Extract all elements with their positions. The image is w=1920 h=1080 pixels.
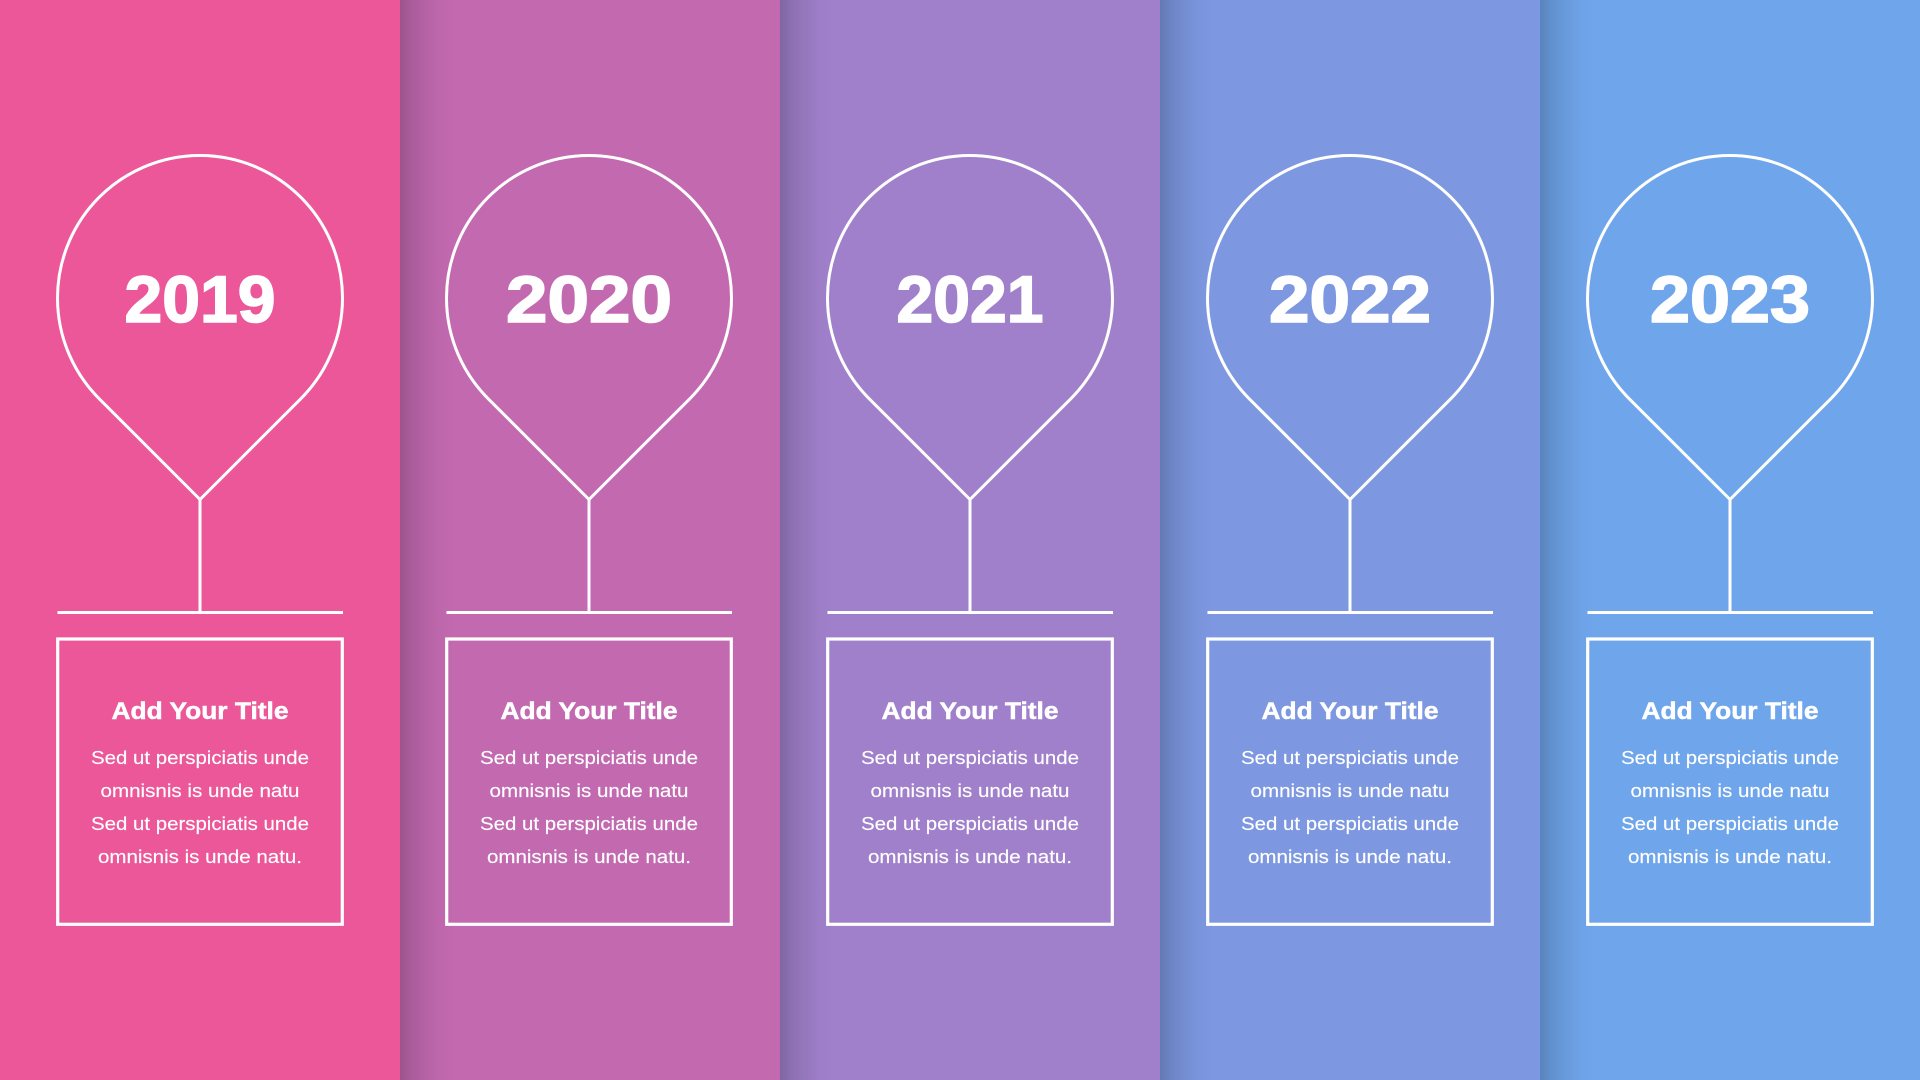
icon: location pin with stem and baseline [828, 155, 1113, 612]
box body text: Sed ut perspiciatis unde [1241, 747, 1459, 768]
box outline [58, 639, 342, 924]
box body text [1621, 747, 1839, 867]
year: 2023: 2023 [1650, 262, 1810, 336]
box title: Add Your Title [1642, 698, 1818, 725]
box title: Add Your Title [500, 698, 678, 725]
year: 2022: 2022 [1269, 262, 1431, 336]
box outline [1588, 639, 1872, 924]
box body text [91, 747, 309, 867]
box body text: omnisnis is unde natu. [1248, 846, 1452, 867]
box title: Add Your Title [882, 698, 1058, 725]
box title: Add Your Title [1262, 698, 1438, 725]
box body text: Sed ut perspiciatis unde [480, 747, 698, 768]
box body text [1241, 747, 1459, 867]
box body text: omnisnis is unde natu. [98, 846, 302, 867]
box body text: Sed ut perspiciatis unde [91, 747, 309, 768]
box body text: omnisnis is unde natu. [487, 846, 691, 867]
icon: location pin with stem and baseline [1208, 155, 1493, 612]
box body text: Sed ut perspiciatis unde [91, 813, 309, 834]
panel: 2022 [1160, 0, 1540, 1080]
year: 2021: 2021 [896, 262, 1044, 336]
box outline [828, 639, 1112, 924]
box body text: omnisnis is unde natu [490, 780, 688, 801]
box body text: Sed ut perspiciatis unde [1241, 813, 1459, 834]
icon: location pin with stem and baseline [446, 155, 732, 612]
box body text: omnisnis is unde natu. [868, 846, 1072, 867]
icon: location pin with stem and baseline [58, 155, 343, 612]
box body text: omnisnis is unde natu [1630, 780, 1830, 801]
panel: 2020 [400, 0, 780, 1080]
box outline [1208, 639, 1492, 924]
icon: location pin with stem and baseline [1588, 155, 1873, 612]
box outline [447, 639, 731, 924]
text box [447, 639, 731, 924]
box body text: omnisnis is unde natu. [1628, 846, 1832, 867]
year: 2019: 2019 [124, 262, 276, 336]
box body text: omnisnis is unde natu [1250, 780, 1450, 801]
text box [58, 639, 342, 924]
box body text: Sed ut perspiciatis unde [480, 813, 698, 834]
box body text: Sed ut perspiciatis unde [861, 747, 1079, 768]
text box [1588, 639, 1872, 924]
panel: 2019 [0, 0, 400, 1080]
box body text: omnisnis is unde natu [870, 780, 1070, 801]
year: 2020: 2020 [506, 262, 672, 336]
box body text [861, 747, 1079, 867]
box body text: Sed ut perspiciatis unde [1621, 813, 1839, 834]
box body text: omnisnis is unde natu [100, 780, 300, 801]
box title: Add Your Title [112, 698, 288, 725]
box body text [480, 747, 698, 867]
text box [828, 639, 1112, 924]
box body text: Sed ut perspiciatis unde [1621, 747, 1839, 768]
box body text: Sed ut perspiciatis unde [861, 813, 1079, 834]
panel: 2021 [780, 0, 1160, 1080]
panel: 2023 [1540, 0, 1920, 1080]
text box [1208, 639, 1492, 924]
